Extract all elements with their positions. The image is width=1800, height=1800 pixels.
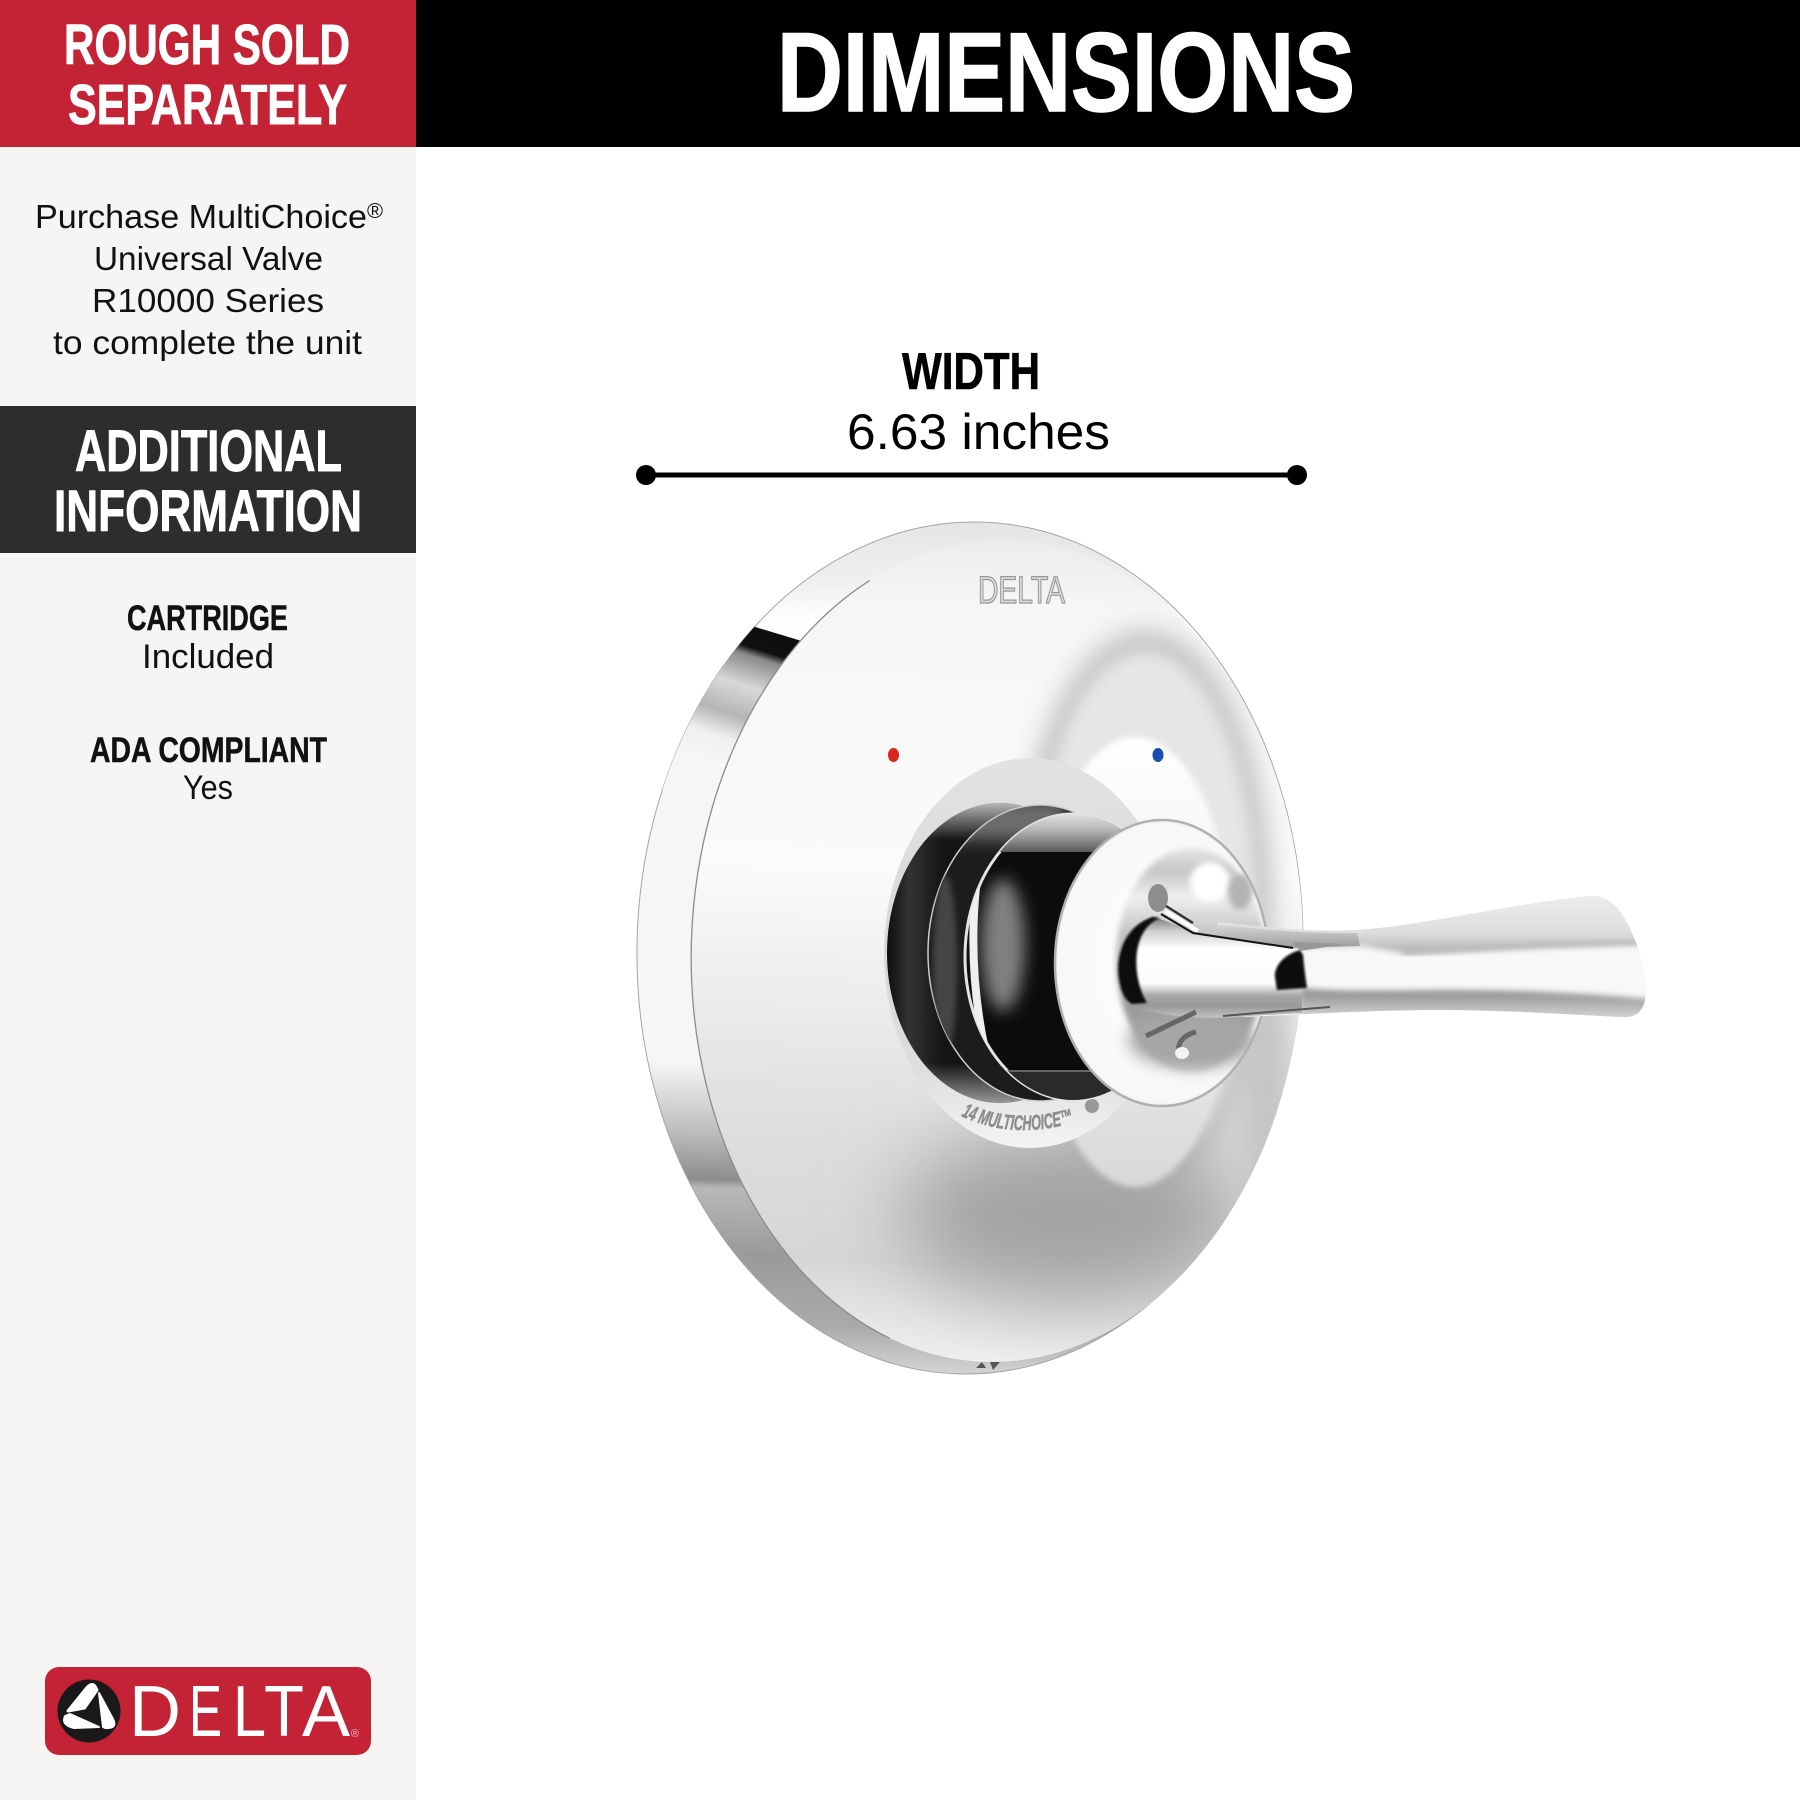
lever clip detail	[1146, 1012, 1196, 1059]
knob set screw	[1148, 884, 1198, 931]
title bar: dimensions	[416, 0, 1800, 147]
banner: additional information: ADDITIONAL	[75, 419, 342, 484]
trim plate rim	[620, 513, 1314, 1383]
cold indicator dot	[1152, 748, 1164, 762]
width label	[847, 343, 1110, 460]
logo: delta	[45, 1667, 371, 1755]
logo: delta: ®	[351, 1728, 359, 1740]
spec: cartridge: CARTRIDGE	[127, 599, 288, 638]
purchase note text: to complete the unit	[53, 324, 362, 361]
spec: cartridge: Included	[142, 638, 274, 676]
middle ring	[927, 804, 1076, 1102]
purchase note text: Universal Valve	[94, 240, 323, 277]
logo: delta: T	[264, 1672, 304, 1752]
logo: delta: D	[129, 1672, 181, 1752]
purchase note text: R10000 Series	[92, 282, 324, 319]
logo: delta: L	[233, 1672, 266, 1752]
title bar: dimensions: DIMENSIONS	[777, 10, 1355, 135]
bottom notch	[976, 1362, 1000, 1370]
handle hub	[1118, 914, 1346, 1018]
engraved delta mark: DELTA	[978, 570, 1065, 612]
purchase note text: Purchase MultiChoice	[35, 198, 356, 235]
knob barrel	[964, 812, 1122, 1100]
width dimension arrow	[636, 465, 1307, 485]
logo: delta: A	[302, 1672, 350, 1752]
purchase note text: ®	[367, 200, 384, 223]
hot indicator dot	[888, 748, 899, 762]
purchase note text	[35, 198, 384, 361]
lever handle	[1215, 896, 1646, 1018]
width label: 6.63 inches	[847, 404, 1110, 460]
trim plate face	[680, 532, 1314, 1370]
spec: ada compliant	[90, 731, 327, 807]
logo: delta: E	[189, 1672, 222, 1752]
escutcheon plate	[884, 758, 1138, 1148]
rear collar	[887, 803, 1022, 1103]
banner: rough sold separately: ROUGH SOLD	[64, 13, 350, 77]
knob face	[1055, 820, 1269, 1106]
spec: ada compliant: ADA COMPLIANT	[90, 731, 327, 770]
banner: rough sold separately: SEPARATELY	[68, 73, 347, 137]
banner: additional information: INFORMATION	[54, 479, 362, 544]
escutcheon plate: 14 MULTICHOICE™	[961, 1104, 1072, 1130]
width label: WIDTH	[902, 343, 1040, 401]
banner: rough sold separately	[0, 0, 416, 147]
spec: ada compliant: Yes	[183, 769, 233, 807]
sidebar panel	[0, 0, 416, 1800]
product: shower valve trim	[636, 522, 1646, 1374]
banner: additional information	[0, 406, 416, 553]
spec: cartridge	[127, 599, 288, 676]
